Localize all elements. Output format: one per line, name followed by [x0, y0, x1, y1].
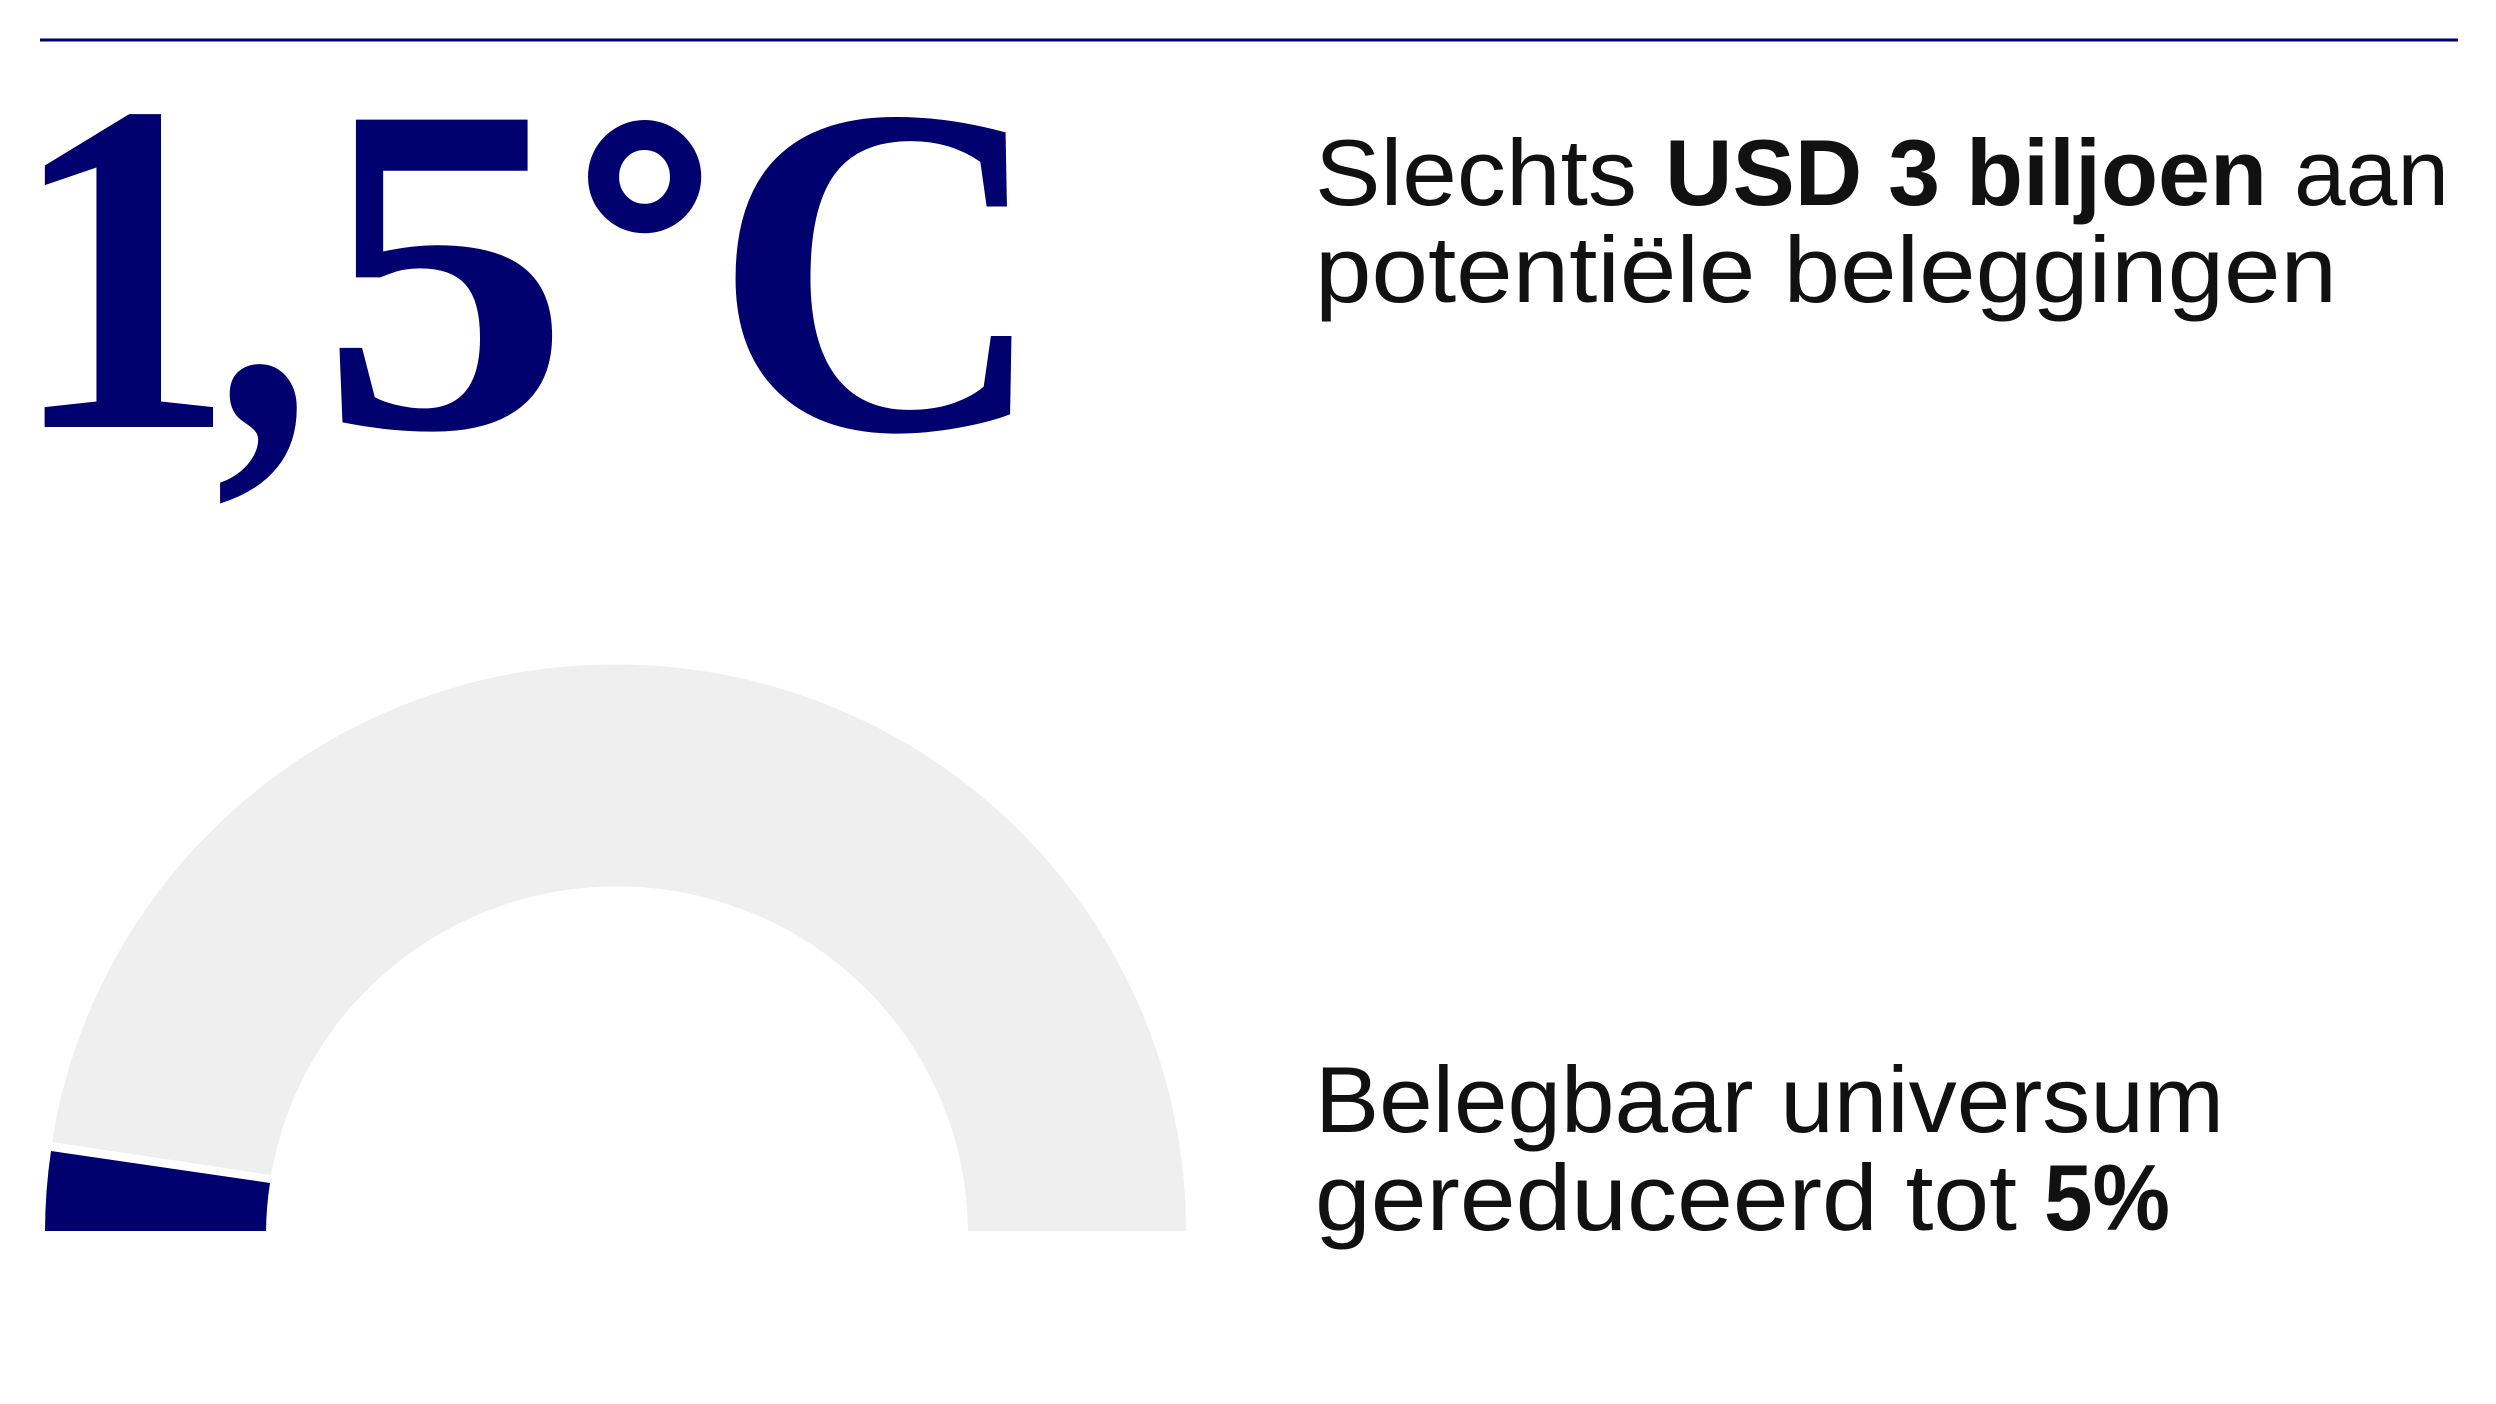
text block: universum 5%: Belegbaar universum: [1315, 1047, 2224, 1152]
heading: 1,5°C: 5: [319, 10, 570, 529]
text block: USD 3 biljoen: potentiële beleggingen: [1315, 217, 2337, 322]
heading: 1,5°C: [8, 5, 1047, 533]
text block: USD 3 biljoen: Slechts: [1315, 120, 1637, 225]
text block: USD 3 biljoen: aan: [2294, 120, 2449, 225]
gauge remainder: [52, 664, 1186, 1231]
heading: 1,5°C: C: [713, 9, 1047, 531]
heading: 1,5°C: 1: [8, 5, 237, 530]
heading: 1,5°C: ,: [215, 22, 311, 533]
text block: universum 5%: gereduceerd tot: [1315, 1145, 2017, 1250]
gauge segment: 5%: [45, 1151, 270, 1231]
text block: USD 3 biljoen: USD 3 biljoen: [1665, 120, 2267, 225]
text block: universum 5%: [1315, 1047, 2224, 1250]
gauge chart: investable universe 5%: [45, 664, 1186, 1231]
text block: USD 3 biljoen: [1315, 120, 2449, 322]
text block: universum 5%: 5%: [2044, 1145, 2170, 1250]
heading: 1,5°C: °: [578, 52, 712, 422]
